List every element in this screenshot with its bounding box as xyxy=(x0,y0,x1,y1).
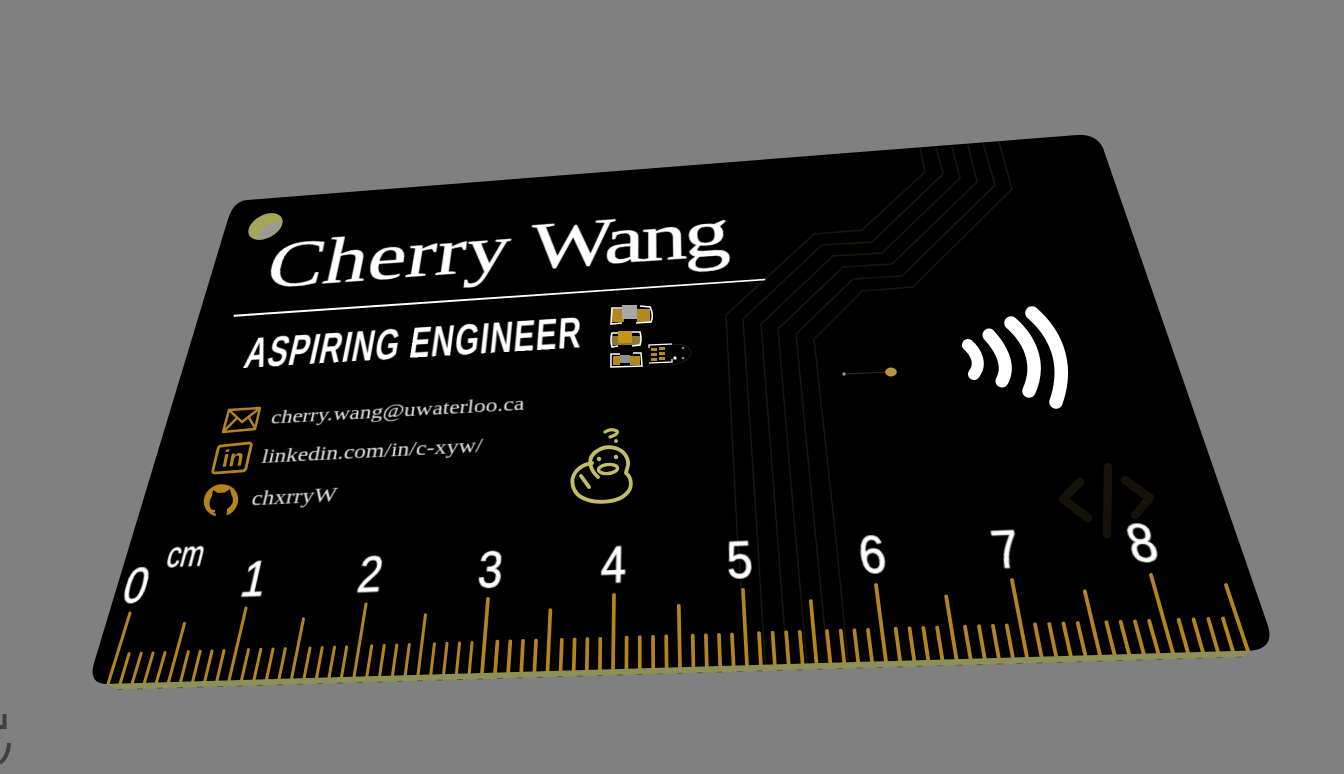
title divider line xyxy=(234,279,765,316)
card body xyxy=(93,135,1270,684)
ruler unit: cm xyxy=(162,534,209,576)
icon: linkedin: in xyxy=(220,445,246,473)
ruler number 8: 8 xyxy=(1120,512,1165,573)
icon: test via xyxy=(842,368,897,376)
ruler ticks xyxy=(108,575,1248,684)
contact: email: cherry.wang@uwaterloo.ca xyxy=(269,393,525,429)
icon: linkedin xyxy=(213,443,251,473)
circuit traces xyxy=(726,142,1012,665)
ruler number 5: 5 xyxy=(725,530,754,589)
ruler number 2: 2 xyxy=(353,545,386,603)
ruler number 6: 6 xyxy=(856,524,890,584)
icon: envelope xyxy=(223,408,260,432)
icon: github xyxy=(198,479,244,522)
contact: github: chxrryW xyxy=(249,483,339,510)
card text layer xyxy=(117,195,1165,613)
icon: electronic components xyxy=(611,305,691,367)
ruler number 7: 7 xyxy=(986,519,1026,579)
subtitle: ASPIRING ENGINEER xyxy=(240,308,583,378)
icon: contactless waves xyxy=(968,313,1061,402)
mounting hole xyxy=(244,208,287,245)
ruler number 0: 0 xyxy=(117,557,156,613)
corner artifact xyxy=(0,714,9,763)
ruler number 1: 1 xyxy=(236,550,273,607)
title: name: Cherry Wang xyxy=(259,195,729,302)
contact: linkedin: linkedin.com/in/c-xyw/ xyxy=(259,435,484,469)
ruler number 3: 3 xyxy=(476,540,506,598)
card edge band xyxy=(106,650,1251,690)
icon: rubber duck xyxy=(572,430,631,502)
ruler number 4: 4 xyxy=(600,535,626,594)
icon: code brackets xyxy=(1063,467,1150,534)
